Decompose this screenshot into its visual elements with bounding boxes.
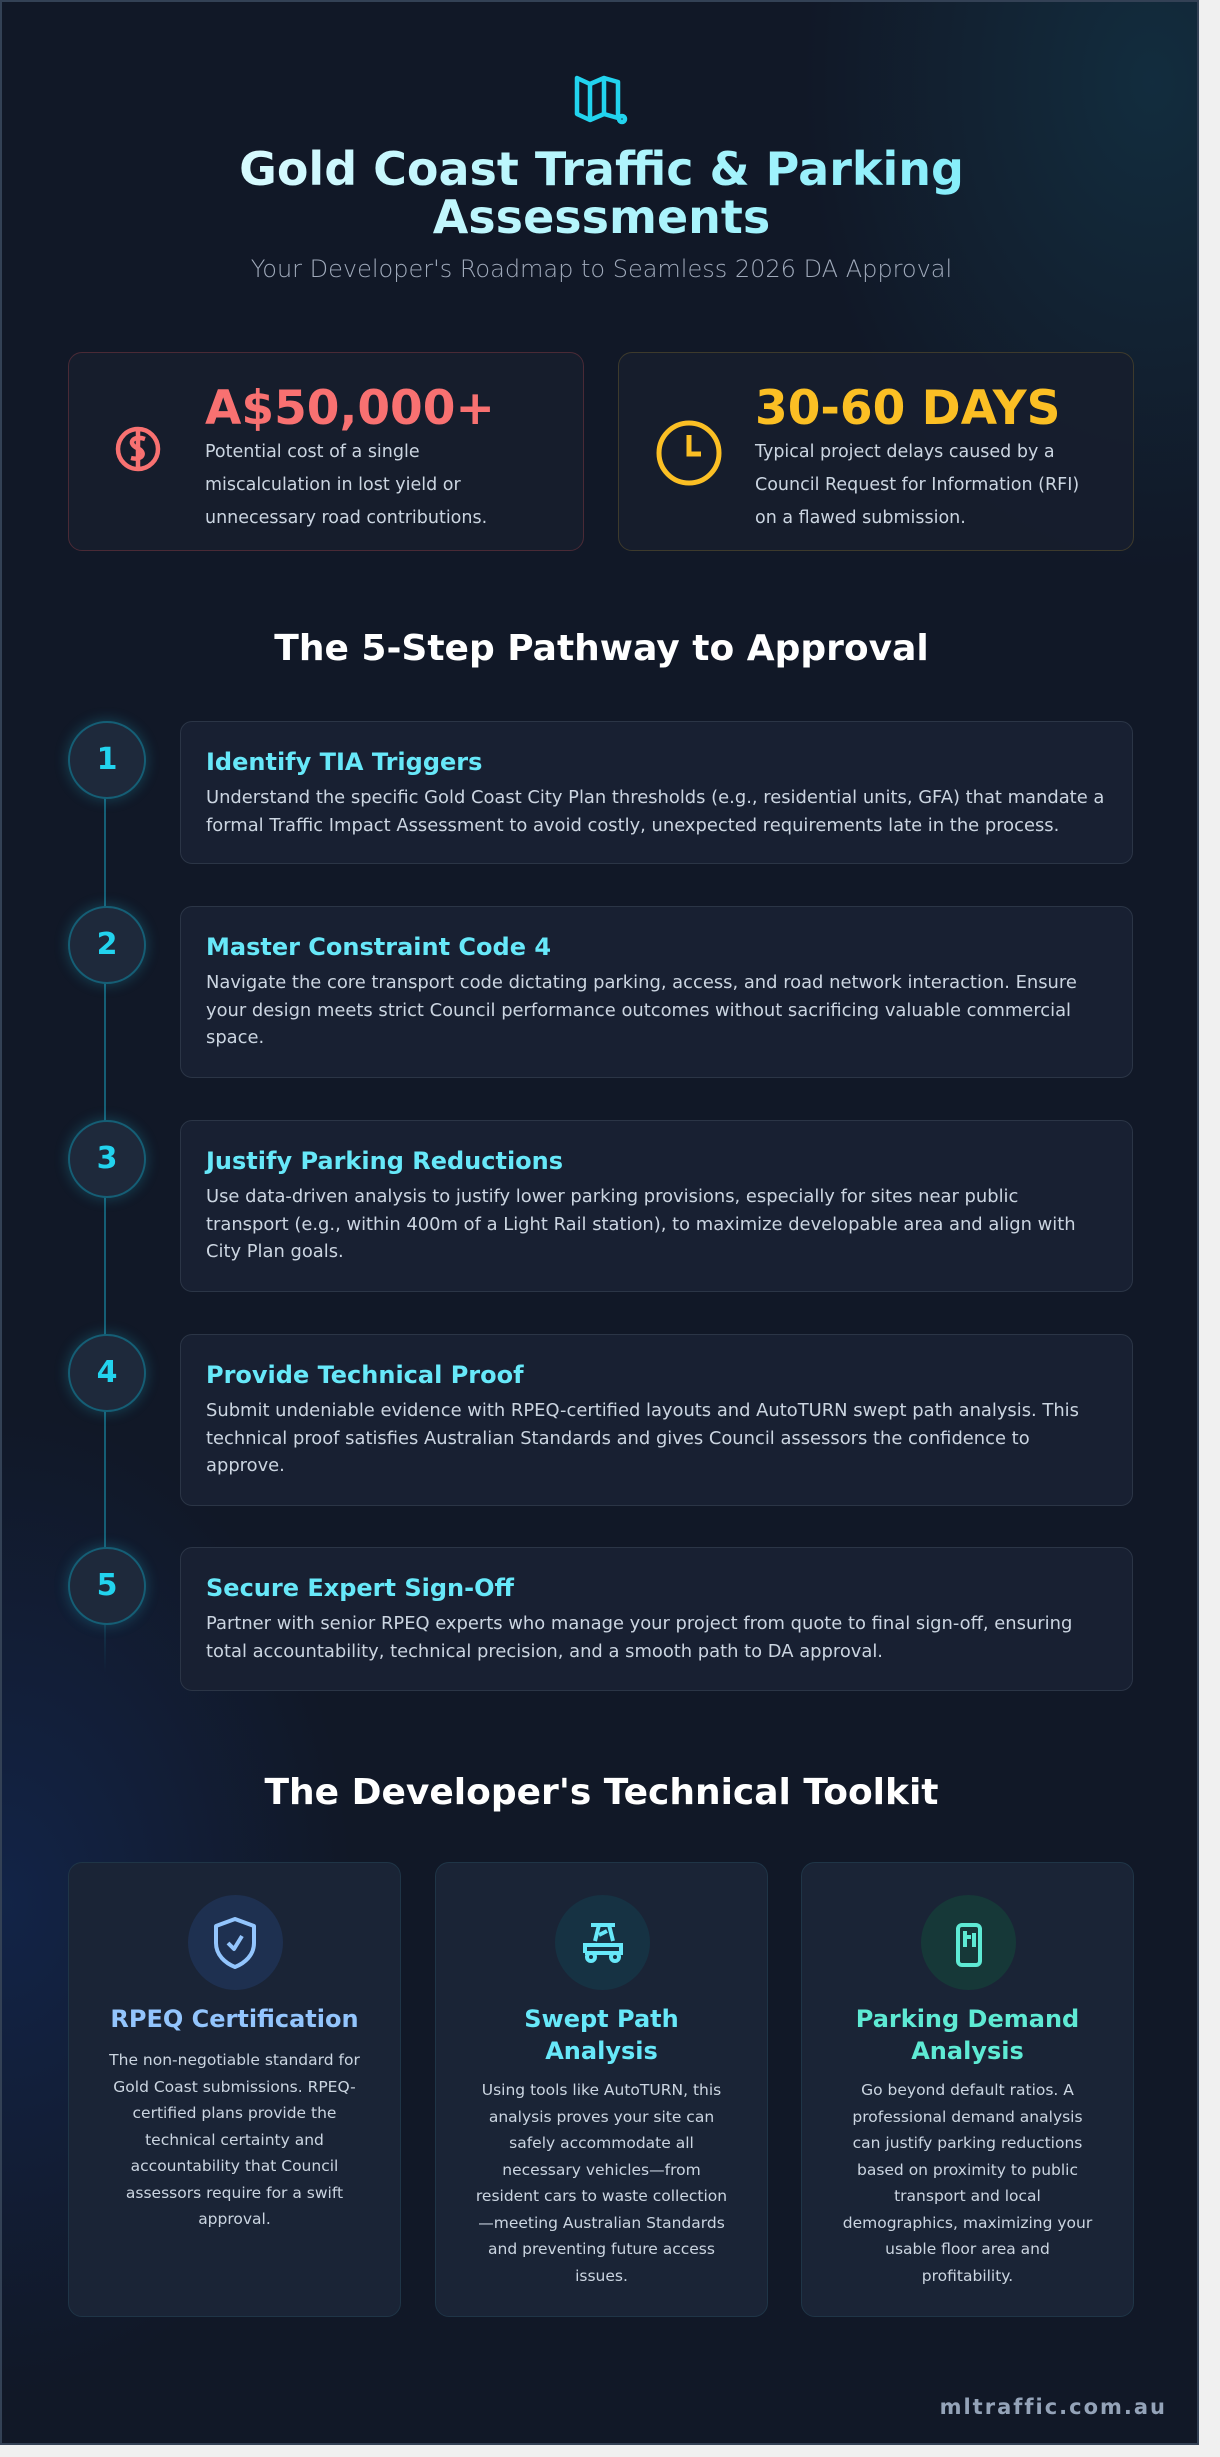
step 3 — [62, 1114, 1133, 1292]
title: Assessments — [433, 190, 770, 244]
panel: swept path: Analysis — [545, 2037, 658, 2065]
icon: parking — [921, 1895, 1016, 1990]
panel: RPEQ certification: RPEQ Certification — [110, 2005, 359, 2033]
panel: RPEQ certification — [68, 1862, 401, 2317]
step 2 — [62, 900, 1133, 1078]
panel: parking demand: Go beyond default ratios. A professional demand analysis can justify parking reductions based on proximity to public transport and local demographics, maximizing your usable floor area and profitability. — [843, 2081, 1092, 2284]
step 5: Secure Expert Sign-Off — [206, 1574, 514, 1602]
step 4: 4 — [97, 1355, 117, 1390]
step 3: Use data-driven analysis to justify lower parking provisions, especially for sites near public — [206, 1186, 1018, 1207]
title — [2, 145, 1201, 241]
stat number: A$50,000+ — [205, 381, 495, 436]
panel: parking demand: Analysis — [911, 2037, 1024, 2065]
panel: swept path: Swept Path — [524, 2005, 679, 2033]
timeline line — [104, 792, 106, 1672]
icon: money — [116, 426, 160, 472]
stat number: 30-60 DAYS — [755, 381, 1060, 436]
panel: parking demand: Parking Demand — [856, 2005, 1079, 2033]
footer: website: mltraffic.com.au — [940, 2395, 1167, 2419]
step 1: 1 — [97, 742, 117, 777]
icon: clock — [656, 420, 722, 486]
step 4: Submit undeniable evidence with RPEQ-certified layouts and AutoTURN swept path analysis. This technical proof satisfies Australian Standards and gives Council assessors the confidence to approve. — [206, 1400, 1079, 1476]
icon: map — [574, 76, 628, 124]
panel: RPEQ certification: The non-negotiable standard for Gold Coast submissions. RPEQ-certified plans provide the technical certainty and accountability that Council assessors require for a swift approval. — [109, 2051, 360, 2228]
step 1: Understand the specific Gold Coast City Plan thresholds (e.g., residential units, GFA) that mandate a formal Traffic Impact Assessment to avoid costly, unexpected requirements late in the process. — [206, 787, 1104, 836]
step 5: Partner with senior RPEQ experts who manage your project from quote to final sign-off, ensuring total accountability, technical precision, and a smooth path to DA approval. — [206, 1613, 1072, 1662]
subtitle: Your Developer's Roadmap to Seamless 2026 DA Approval — [251, 255, 952, 283]
step 2: 2 — [97, 927, 117, 962]
title: Gold Coast Traffic & Parking — [239, 142, 964, 196]
heading: pathway: The 5-Step Pathway to Approval — [274, 628, 929, 669]
step 1 — [62, 715, 1133, 864]
panel: parking demand — [801, 1862, 1134, 2317]
icon: shield — [188, 1895, 283, 1990]
step 3: transport (e.g., within 400m of a Light Rail station), to maximize developable area and align with City Plan goals. — [206, 1214, 1076, 1262]
icon: vehicle — [555, 1895, 650, 1990]
step 2: Master Constraint Code 4 — [206, 933, 551, 961]
step 3: 3 — [97, 1141, 117, 1176]
panel: swept path — [435, 1862, 768, 2317]
stat description: Potential cost of a single miscalculation in lost yield or unnecessary road contributions. — [205, 442, 487, 528]
step 1: Identify TIA Triggers — [206, 748, 482, 776]
heading: toolkit: The Developer's Technical Toolkit — [264, 1772, 938, 1813]
stat description: Typical project delays caused by a Council Request for Information (RFI) on a flawed submission. — [755, 442, 1079, 528]
step 4 — [62, 1328, 1133, 1506]
panel: delay stat — [618, 352, 1134, 551]
panel: swept path: Using tools like AutoTURN, this analysis proves your site can safely accommodate all necessary vehicles—from resident cars to waste collection—meeting Australian Standards and preventing future access issues. — [476, 2081, 727, 2284]
panel: cost stat — [68, 352, 584, 551]
step 3: Justify Parking Reductions — [206, 1147, 563, 1175]
step 2: Navigate the core transport code dictating parking, access, and road network interaction. Ensure your design meets strict Council performance outcomes without sacrificing valuable commercial space. — [206, 972, 1077, 1048]
step 4: Provide Technical Proof — [206, 1361, 524, 1389]
step 5 — [63, 1541, 1133, 1691]
step 5: 5 — [97, 1568, 117, 1603]
